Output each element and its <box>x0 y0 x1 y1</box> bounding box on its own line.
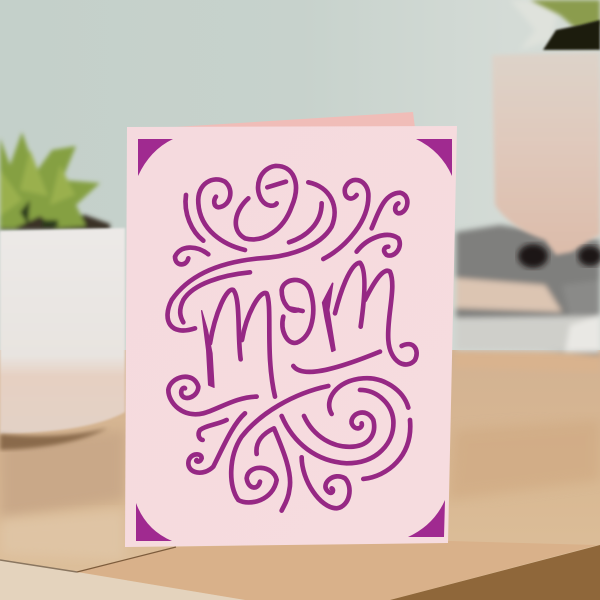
pot shadow <box>0 428 108 450</box>
table front edge <box>0 541 600 600</box>
potted succulent, left <box>0 132 125 450</box>
wooden table top <box>0 350 600 600</box>
dark soil <box>543 20 600 50</box>
green stems <box>530 0 600 28</box>
bottom flourishes <box>168 377 410 511</box>
word: Mom <box>202 263 417 397</box>
white pot <box>0 228 125 434</box>
folded card back flap <box>175 112 415 128</box>
pot feet shadows <box>518 244 548 268</box>
potted plant, right <box>510 0 600 50</box>
O Mom lettering <box>168 166 417 511</box>
pale blurred leaves <box>510 0 560 50</box>
corner cut-outs <box>136 139 452 541</box>
stack of books <box>456 225 600 355</box>
greeting card front <box>125 126 457 547</box>
underline dash <box>293 352 380 372</box>
pink pot <box>492 52 600 268</box>
top flourishes <box>168 166 407 331</box>
succulent plant <box>0 132 110 230</box>
